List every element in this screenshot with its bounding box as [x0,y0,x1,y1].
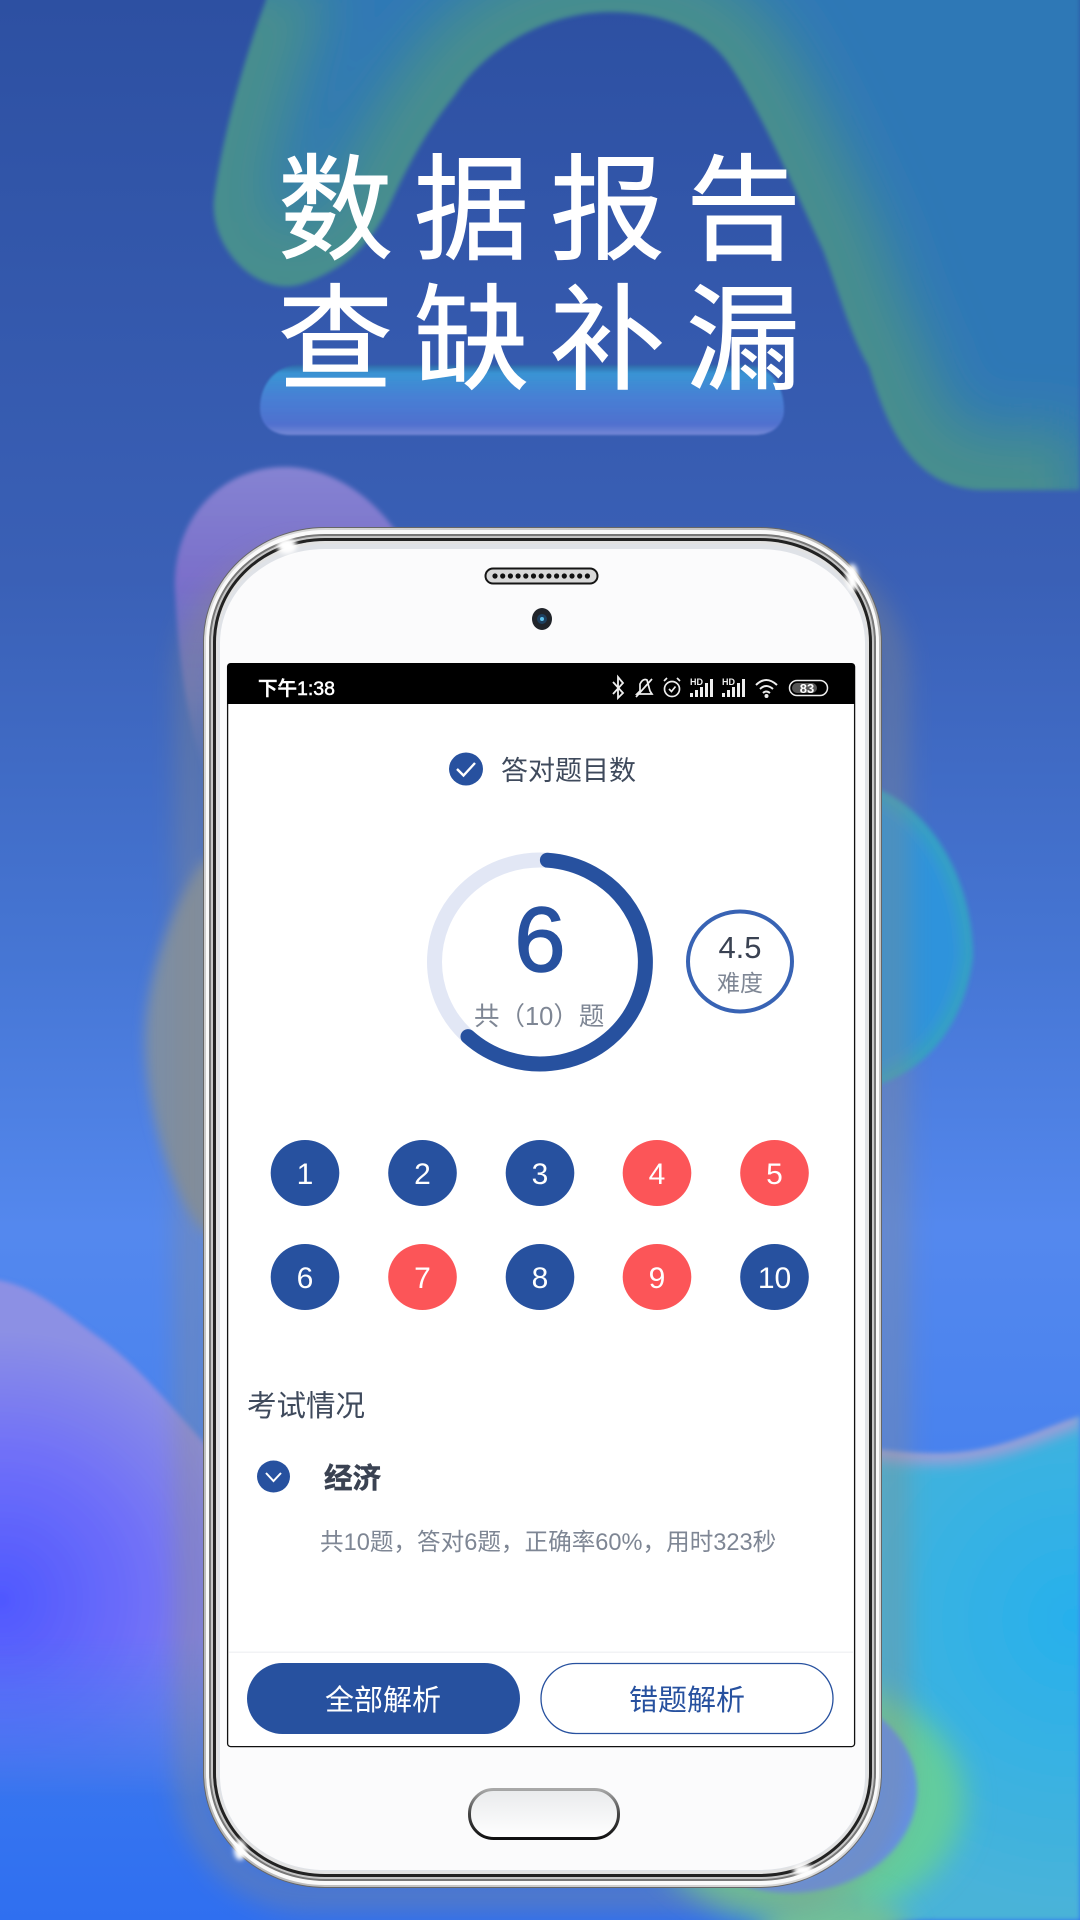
subject row: 经济 [324,1463,382,1495]
button: all analysis [247,1663,520,1734]
icon: wifi [756,680,777,697]
title: 数据报告 [278,147,801,275]
title highlight pill [260,365,784,435]
question number grid: 1 [297,1158,313,1191]
front camera [532,608,552,630]
icon: signal 1 [690,677,713,697]
question number grid: 8 [532,1262,548,1295]
progress ring: 6 [514,889,566,991]
difficulty badge: 难度 [717,970,763,996]
icon: alarm [664,678,680,696]
question number grid: 2 [414,1158,431,1191]
question number grid: 6 [297,1262,313,1295]
icon: battery: 83 [800,681,814,696]
button: wrong analysis [541,1664,833,1734]
question number grid: 5 [766,1158,783,1191]
progress ring [434,860,646,1064]
question number grid: 10 [758,1262,791,1295]
screen [227,663,855,1747]
home button [470,1790,618,1838]
heading: correct answers: 答对题目数 [501,756,636,786]
button: all analysis: 全部解析 [325,1684,441,1717]
icon: battery [790,680,828,696]
speaker grille [486,568,598,584]
exam section heading: 考试情况 [247,1390,365,1423]
question number grid: 7 [414,1262,431,1295]
status bar [227,663,855,704]
status bar: 下午1:38 [258,678,335,700]
icon: signal 1: HD [690,677,703,687]
phone chrome frame [203,527,882,1888]
icon: signal 2: HD [722,677,735,687]
question number grid [271,1140,809,1310]
question number grid: 9 [649,1262,665,1295]
icon: chevron circle [257,1460,290,1492]
title: 查缺补漏 [278,277,801,405]
icon: muted bell [636,679,652,697]
subject stats: 共10题，答对6题，正确率60%，用时323秒 [320,1529,776,1556]
button: wrong analysis: 错题解析 [629,1684,745,1717]
question number grid: 3 [532,1158,548,1191]
subject row [257,1460,382,1495]
progress ring: 共（10）题 [474,1003,604,1031]
heading: correct answers [449,752,636,786]
title [278,147,801,405]
icon: check circle [449,752,483,786]
phone mock-up [203,527,882,1888]
difficulty badge: 4.5 [718,930,762,965]
icon: bluetooth [613,677,623,698]
question number grid: 4 [649,1158,665,1191]
icon: signal 2 [722,677,745,697]
difficulty badge [688,912,792,1012]
